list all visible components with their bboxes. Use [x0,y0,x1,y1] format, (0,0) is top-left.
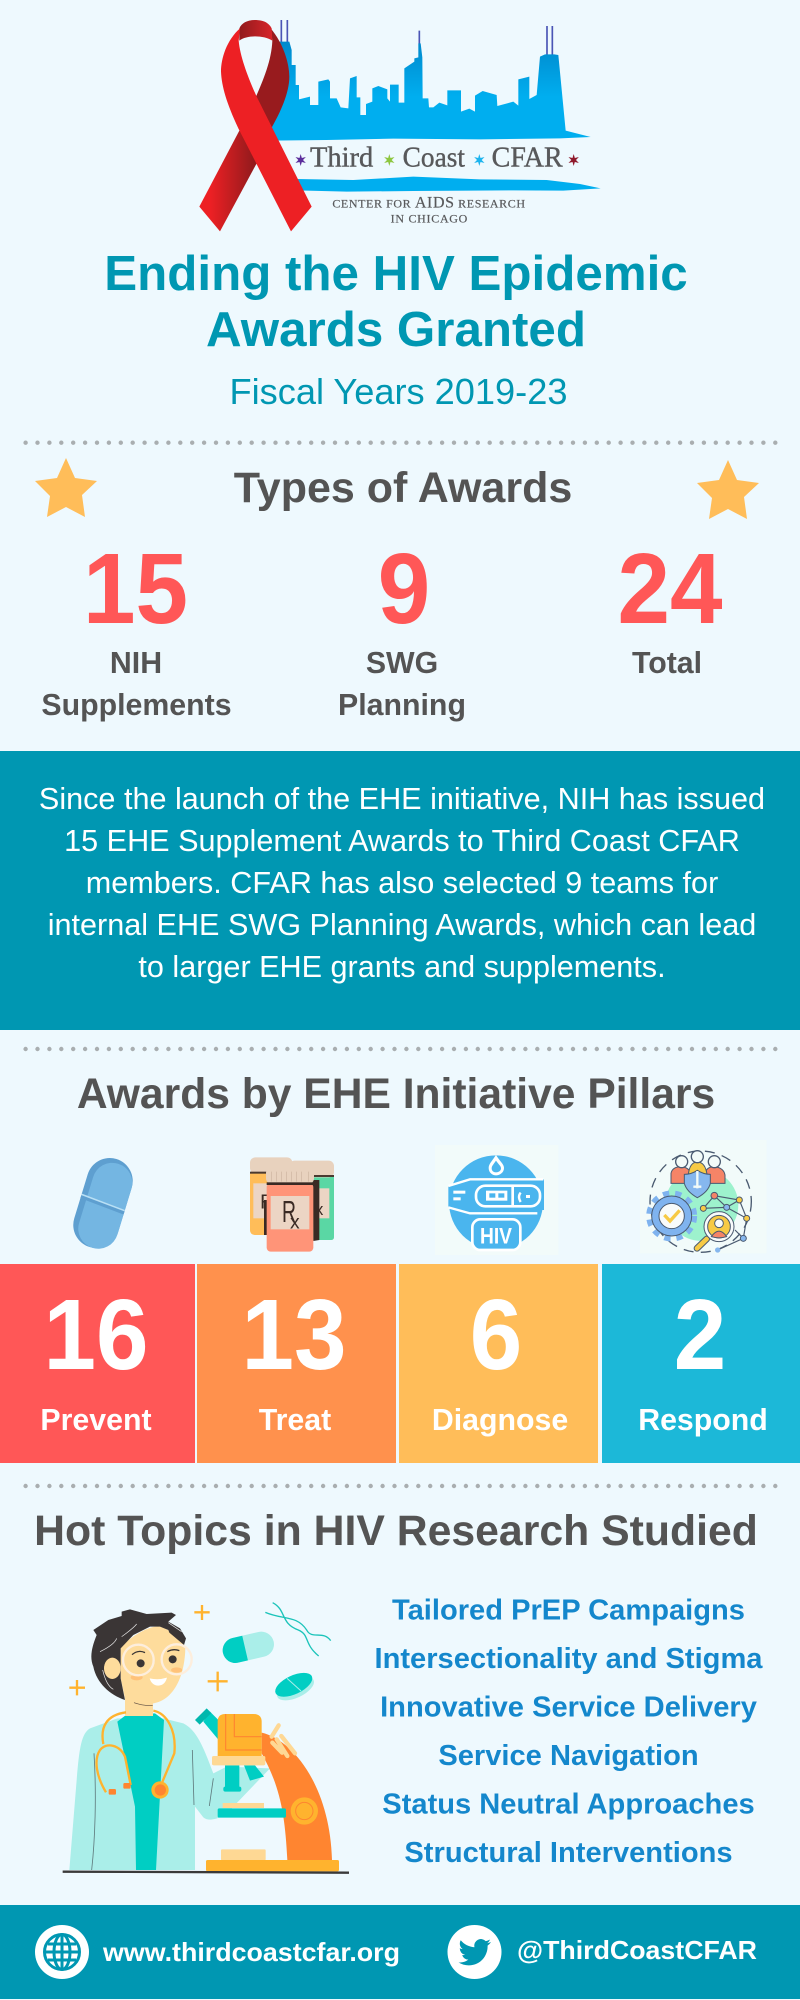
stat tile: treat: Treat [259,1404,331,1437]
logo name: Coast [403,143,465,174]
list: hot topics [374,1594,763,1869]
panel: summary [0,751,800,1030]
footer [0,1905,800,1999]
logo: Third Coast CFAR [199,20,601,231]
stat: NIH supplements: 15 [83,533,188,645]
icon: prescription bottles: R [260,1190,275,1213]
icon: star left [35,458,97,517]
website: www.thirdcoastcfar.org [102,1937,400,1967]
summary text: internal EHE SWG Planning Awards, which can lead [48,908,756,942]
stat: SWG planning: SWG [366,647,438,680]
stat: SWG planning: 9 [378,533,430,645]
logo name: CFAR [492,143,563,174]
icon: prescription bottles [250,1157,334,1252]
icon: star right [697,460,759,519]
icon: pill [68,1152,138,1254]
stat tile: treat: 13 [242,1279,346,1391]
icon: globe [35,1925,89,1979]
stat tile: prevent: 16 [44,1279,148,1391]
heading: hot topics: Hot Topics in HIV Research Studied [34,1507,758,1555]
microscope [203,1712,220,1742]
icon: HIV test: HIV [480,1224,512,1249]
section: types of awards [35,458,759,722]
stat: total: Total [632,647,702,680]
stat: NIH supplements: NIH [110,647,162,680]
list: hot topics: Structural Interventions [404,1837,733,1869]
logo name: Third [310,143,373,174]
icon: HIV test [435,1145,558,1255]
summary text: members. CFAR has also selected 9 teams for [86,866,718,900]
stat tile: respond: Respond [638,1404,768,1437]
stat tile: diagnose [399,1264,598,1463]
stat: NIH supplements [41,533,232,722]
stat tile: respond: 2 [674,1279,726,1391]
skyline [270,20,601,192]
head [125,1693,153,1716]
stat tile: treat [197,1264,396,1463]
stat: SWG planning: Planning [338,689,466,722]
stat tile: diagnose: 6 [470,1279,522,1391]
stat tile: prevent: Prevent [40,1404,152,1437]
capsule [220,1629,277,1666]
list: hot topics: Status Neutral Approaches [382,1788,755,1820]
subtitle: Fiscal Years 2019-23 [230,371,567,412]
logo name: CENTER FOR AIDS RESEARCH [332,194,525,211]
heading: Types of Awards [234,464,572,512]
title [104,246,688,357]
stat: total: 24 [618,533,723,645]
summary text: Since the launch of the EHE initiative, NIH has issued [39,782,765,816]
list: hot topics: Innovative Service Delivery [380,1692,758,1724]
logo name: IN CHICAGO [391,211,468,225]
sparkles [69,1605,228,1695]
tablet [272,1668,318,1705]
stethoscope [97,1711,175,1792]
heading: pillars: Awards by EHE Initiative Pillars [77,1070,715,1118]
dna [265,1603,331,1656]
coat [69,1718,270,1870]
twitter handle: @ThirdCoastCFAR [517,1935,757,1965]
icon: prescription bottles: x [290,1213,300,1234]
list: hot topics: Intersectionality and Stigma [374,1643,763,1675]
title: Ending the HIV Epidemic [104,246,688,301]
summary text: to larger EHE grants and supplements. [138,950,666,984]
icon: prescription bottles: x [315,1200,324,1219]
stat: NIH supplements: Supplements [41,689,232,722]
ribbon [199,20,312,231]
summary text: 15 EHE Supplement Awards to Third Coast CFAR [64,824,740,858]
list: hot topics: Service Navigation [438,1740,699,1772]
stat: SWG planning [338,533,466,722]
ground line [63,1872,349,1873]
icon: respond network [640,1140,767,1253]
stat tile: respond [602,1264,800,1463]
icon: prescription bottles: R [282,1195,296,1229]
stat tile: prevent [0,1264,195,1463]
shirt [117,1713,164,1870]
logo name [295,143,579,225]
illustration: scientist with microscope [63,1603,349,1873]
summary text [39,782,765,984]
title: Awards Granted [206,302,586,357]
list: hot topics: Tailored PrEP Campaigns [392,1594,745,1626]
icon: twitter [448,1925,502,1979]
stat tile: diagnose: Diagnose [432,1404,568,1437]
